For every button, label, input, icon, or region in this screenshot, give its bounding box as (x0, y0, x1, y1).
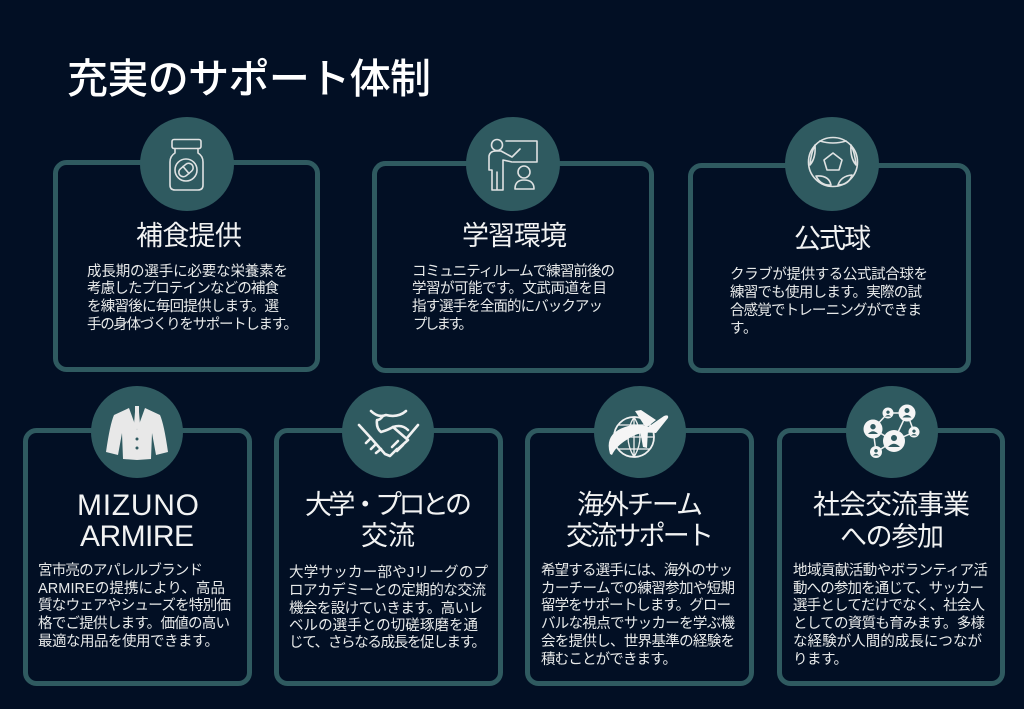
text block: 成長期の選手に必要な栄養素を (87, 262, 288, 280)
text block: す。 (730, 320, 758, 337)
title: 充実のサポート体制 (67, 56, 431, 102)
icon: jacket (91, 386, 183, 478)
text block: 留学をサポートします。グロー (541, 597, 731, 614)
text block: 宮市亮のアパレルブランド (38, 561, 203, 579)
heading (77, 489, 199, 553)
heading: への参加 (840, 522, 944, 552)
text block: 格でご提供します。価値の高い (38, 615, 230, 632)
heading: 補食提供 (136, 221, 242, 251)
text block: 動への参加を通じて、サッカー (793, 580, 984, 597)
heading: 公式球 (794, 224, 871, 254)
heading: 交流サポート (566, 521, 714, 551)
text block: ARMIREの提携により、高品 (38, 580, 225, 597)
text block: を練習後に毎回提供します。選 (87, 298, 279, 315)
icon: teacher and student (466, 117, 560, 211)
text block: じて、さらなる成長を促します。 (289, 634, 486, 651)
text block (289, 564, 488, 651)
text block: クラブが提供する公式試合球を (730, 265, 928, 283)
text block: 機会を設けていきます。高いレ (289, 600, 483, 617)
panel: 公式球 (690, 117, 968, 370)
heading (305, 490, 472, 551)
panel: MIZUNO ARMIRE (26, 386, 250, 684)
text block: 希望する選手には、海外のサッ (541, 562, 733, 579)
heading: 社会交流事業 (813, 490, 970, 520)
text block (541, 562, 736, 668)
heading: 海外チーム (577, 490, 703, 520)
text block: 会を提供し、世界基準の経験を (541, 633, 735, 650)
panel: 社会交流事業への参加 (780, 386, 1002, 684)
icon: handshake (342, 386, 434, 478)
text block: ります。 (793, 651, 848, 668)
heading: ARMIRE (80, 520, 194, 553)
text block: ベルの選手との切磋琢磨を通 (289, 617, 478, 634)
text block: 考慮したプロテインなどの補食 (87, 280, 280, 297)
text block (412, 263, 615, 333)
icon: soccer ball (785, 117, 879, 211)
text block (38, 561, 231, 650)
text block (87, 262, 298, 333)
heading: 大学・プロとの (305, 490, 472, 520)
icon: supplement bottle (140, 117, 234, 211)
text block (730, 265, 928, 337)
text block: 手の身体づくりをサポートします。 (87, 316, 298, 333)
text block: 地域貢献活動やボランティア活 (793, 562, 988, 579)
text block: 選手としてだけでなく、社会人 (793, 597, 986, 614)
icon: globe and plane (594, 386, 686, 478)
panel: 補食提供 (56, 117, 318, 370)
text block: な経験が人間的成長につなが (793, 633, 982, 650)
text block (793, 562, 988, 668)
text block: 練習でも使用します。実際の試 (730, 284, 922, 301)
text block: 積むことができます。 (541, 651, 677, 668)
text block: 学習が可能です。文武両道を目 (412, 280, 607, 297)
text block: としての資質も育みます。多様 (793, 614, 986, 632)
panel: 海外チーム交流サポート (528, 386, 752, 684)
text block: 最適な用品を使用できます。 (38, 633, 219, 650)
text block: 合感覚でトレーニングができま (730, 302, 922, 319)
heading: MIZUNO (77, 489, 199, 522)
text block: プします。 (413, 316, 473, 333)
icon: people network (846, 386, 938, 478)
text block: コミュニティルームで練習前後の (412, 263, 615, 280)
text block: カーチームでの練習参加や短期 (541, 580, 735, 597)
panel: 学習環境 (374, 117, 652, 370)
heading (566, 490, 714, 551)
heading: 交流 (361, 521, 415, 551)
heading (813, 490, 970, 552)
text block: ロアカデミーとの定期的な交流 (289, 581, 486, 599)
panel: 大学・プロとの交流 (276, 386, 500, 684)
text block: 質なウェアやシューズを特別価 (38, 596, 231, 614)
heading: 学習環境 (462, 221, 567, 251)
text block: 大学サッカー部やJリーグのプ (289, 564, 488, 581)
text block: 指す選手を全面的にバックアッ (412, 298, 603, 315)
text block: バルな視点でサッカーを学ぶ機 (541, 615, 736, 632)
